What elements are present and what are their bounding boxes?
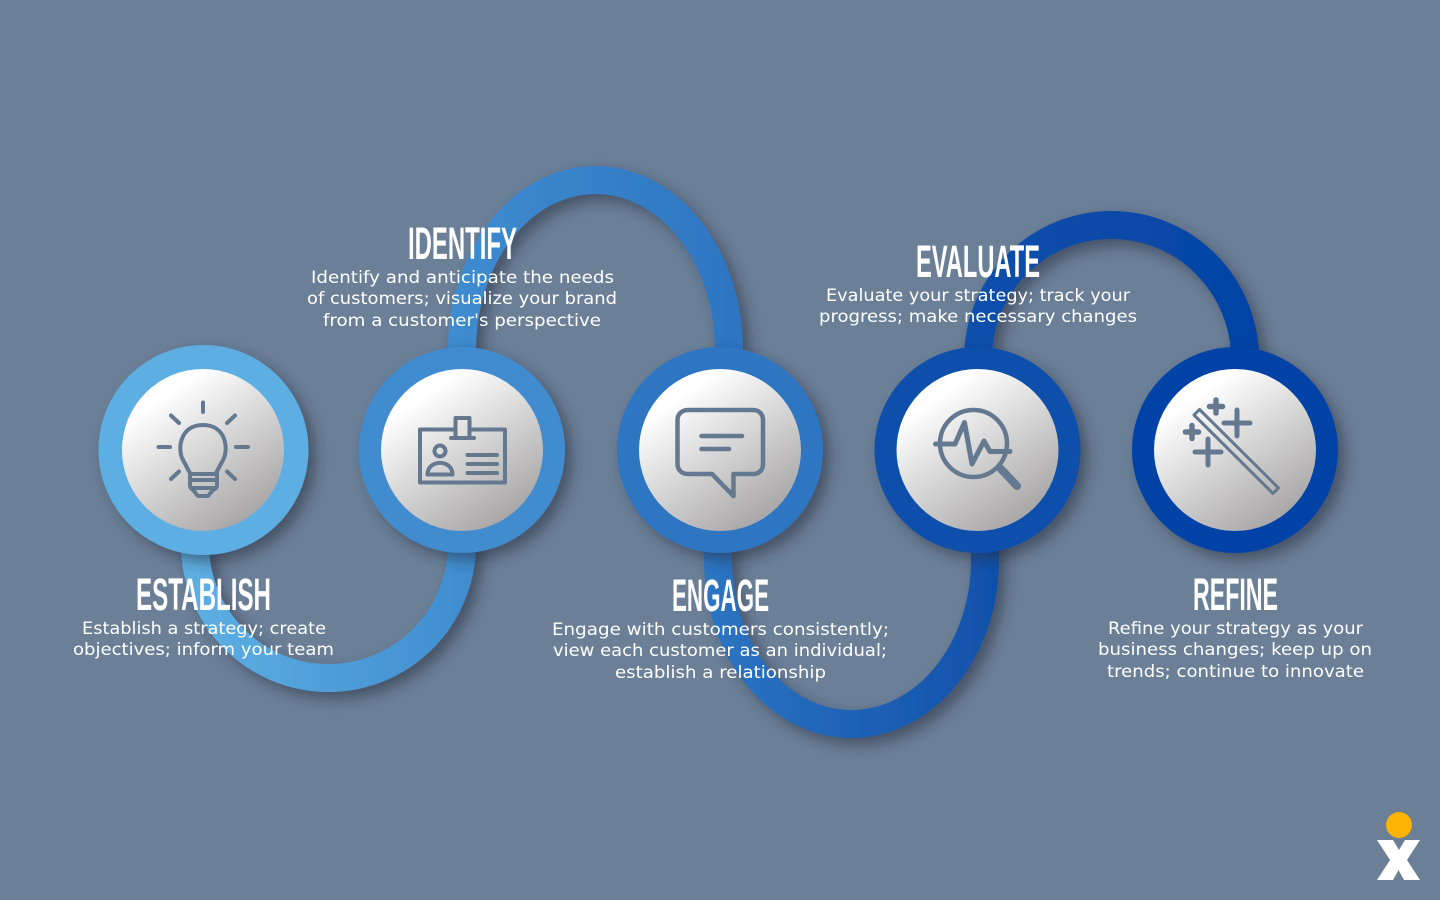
- ring: establish: [98, 345, 308, 555]
- ring: evaluate: [874, 347, 1080, 553]
- arc: evaluate to refine: [978, 225, 1245, 400]
- description: identify: Identify and anticipate the needs: [311, 268, 614, 288]
- ring: engage: [617, 347, 823, 553]
- icon: magnifier with pulse: [936, 410, 1017, 486]
- logo dot: [1386, 812, 1412, 838]
- heading: evaluate: EVALUATE: [916, 236, 1040, 287]
- text block: establish: [73, 569, 334, 660]
- text block: evaluate: [819, 236, 1137, 327]
- icon: id badge: [420, 418, 505, 482]
- arc: engage to evaluate: [718, 500, 985, 724]
- icon: magic wand: [1186, 400, 1278, 494]
- description: refine: Refine your strategy as your: [1108, 619, 1363, 639]
- logo: [1377, 812, 1420, 880]
- disc: refine: [1154, 369, 1316, 531]
- text block: identify: [307, 218, 617, 331]
- disc: evaluate: [896, 369, 1058, 531]
- arc: identify to engage: [462, 180, 729, 400]
- text block: engage: [552, 570, 889, 683]
- description: engage: view each customer as an individual;: [553, 641, 887, 661]
- heading: identify: IDENTIFY: [408, 218, 517, 269]
- description: evaluate: Evaluate your strategy; track your: [826, 286, 1130, 306]
- step node: engage: [617, 347, 823, 553]
- description: establish: [73, 619, 334, 660]
- description: establish: Establish a strategy; create: [82, 619, 326, 639]
- text block: refine: [1098, 569, 1372, 682]
- description: refine: [1098, 619, 1372, 682]
- description: identify: of customers; visualize your brand: [307, 289, 617, 309]
- ring: refine: [1132, 347, 1338, 553]
- disc: establish: [122, 369, 284, 531]
- icon: light bulb: [158, 402, 248, 496]
- logo x mark: [1377, 840, 1420, 880]
- icon: speech bubble: [678, 410, 763, 496]
- description: establish: objectives; inform your team: [73, 640, 334, 660]
- disc: identify: [381, 369, 543, 531]
- step node: refine: [1132, 347, 1338, 553]
- disc: engage: [639, 369, 801, 531]
- step node: establish: [98, 345, 308, 555]
- step node: identify: [359, 347, 565, 553]
- description: engage: Engage with customers consistently;: [552, 620, 889, 640]
- description: identify: [307, 268, 617, 331]
- ring: identify: [359, 347, 565, 553]
- description: evaluate: progress; make necessary changes: [819, 307, 1137, 327]
- description: refine: trends; continue to innovate: [1107, 662, 1364, 682]
- description: engage: [552, 620, 889, 683]
- arc: establish to identify: [195, 500, 462, 678]
- heading: establish: ESTABLISH: [136, 569, 271, 620]
- text block: engage: ENGAGE: [672, 570, 769, 621]
- description: refine: business changes; keep up on: [1098, 640, 1372, 660]
- description: engage: establish a relationship: [615, 663, 826, 683]
- description: evaluate: [819, 286, 1137, 327]
- heading: refine: REFINE: [1193, 569, 1278, 620]
- description: identify: from a customer's perspective: [323, 311, 601, 331]
- step node: evaluate: [874, 347, 1080, 553]
